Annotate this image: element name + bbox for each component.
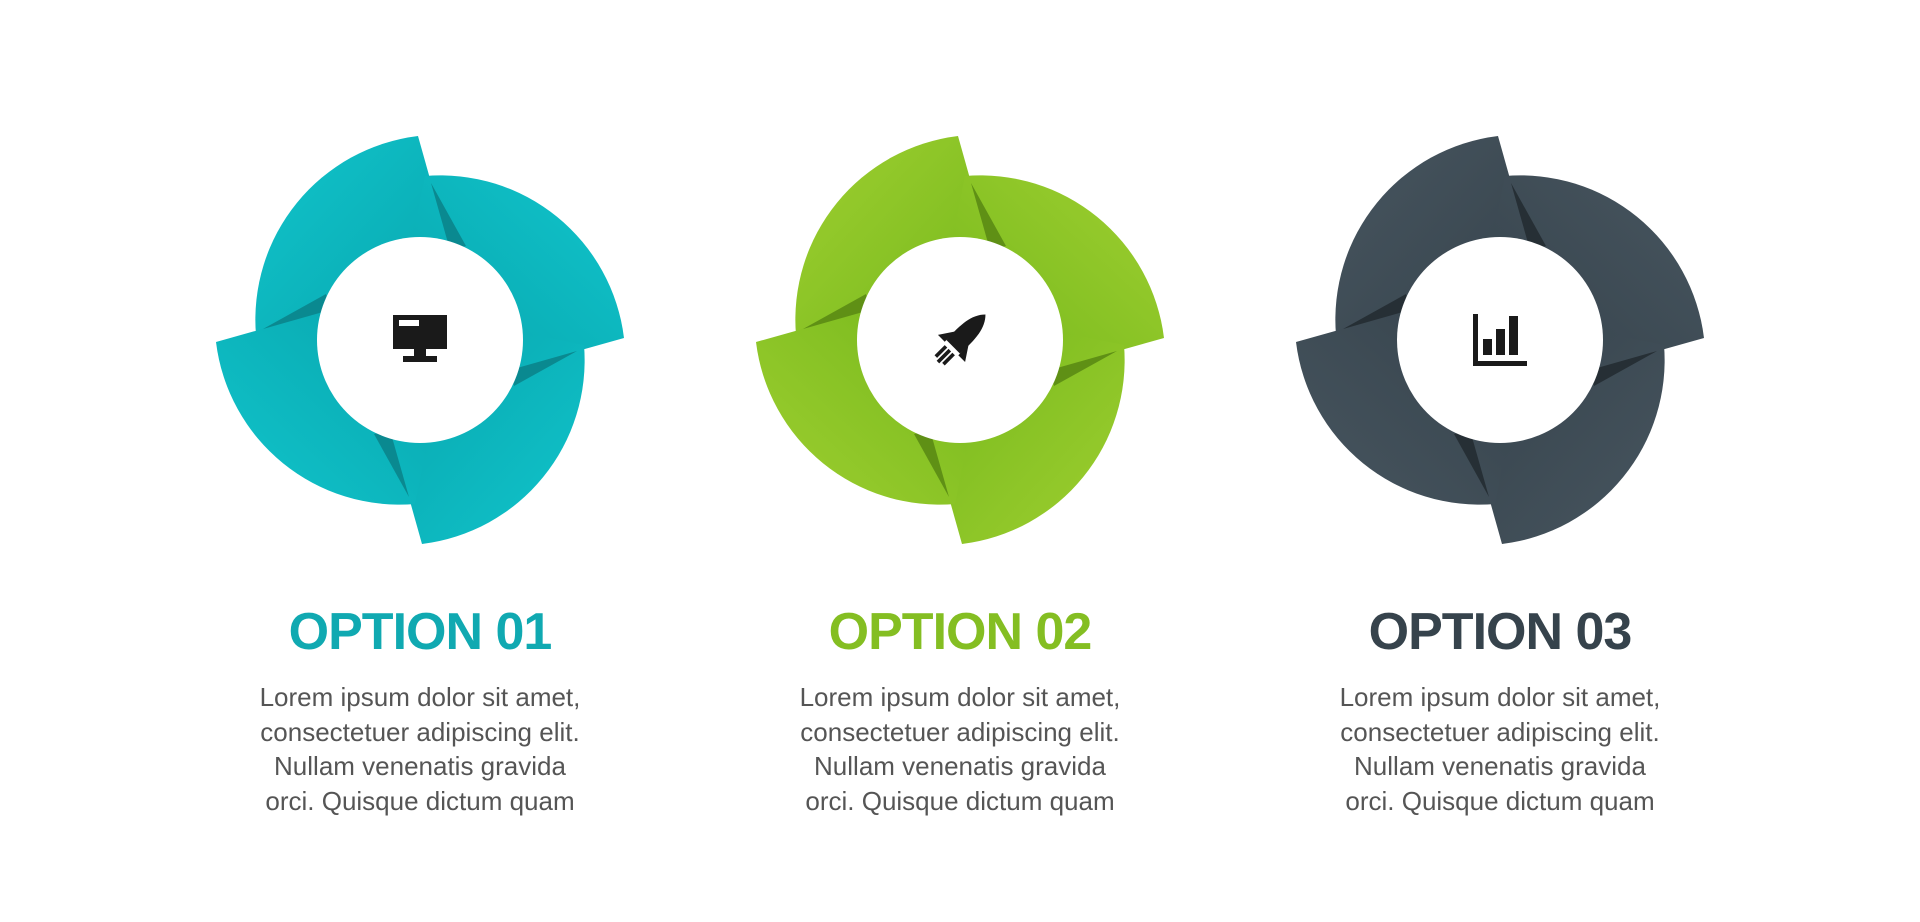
text: option 01 xyxy=(260,682,580,816)
text: option 02: consectetuer adipiscing elit. xyxy=(800,716,1120,746)
text: option 01: Nullam venenatis gravida xyxy=(274,751,566,781)
text: option 02 xyxy=(800,682,1120,816)
text: option 02: Nullam venenatis gravida xyxy=(814,751,1106,781)
icon: bar chart xyxy=(1473,314,1527,366)
text: option 01: consectetuer adipiscing elit. xyxy=(260,716,580,746)
heading: option 02: OPTION 02 xyxy=(829,603,1091,661)
text: option 01: Lorem ipsum dolor sit amet, xyxy=(260,682,580,712)
text: option 02: orci. Quisque dictum quam xyxy=(805,786,1115,816)
heading: option 01: OPTION 01 xyxy=(289,603,551,661)
pinwheel 2 xyxy=(756,136,1164,544)
text: option 03: consectetuer adipiscing elit. xyxy=(1340,716,1660,746)
text: option 01: orci. Quisque dictum quam xyxy=(265,786,575,816)
text: option 02: Lorem ipsum dolor sit amet, xyxy=(800,682,1120,712)
text: option 03: orci. Quisque dictum quam xyxy=(1345,786,1655,816)
text: option 03: Nullam venenatis gravida xyxy=(1354,751,1646,781)
heading: option 03: OPTION 03 xyxy=(1369,603,1631,661)
text: option 03 xyxy=(1340,682,1660,816)
text: option 03: Lorem ipsum dolor sit amet, xyxy=(1340,682,1660,712)
pinwheel 1 xyxy=(216,136,624,544)
pinwheel 3 xyxy=(1296,136,1704,544)
icon: monitor xyxy=(393,315,447,362)
icon: rocket xyxy=(924,301,999,376)
